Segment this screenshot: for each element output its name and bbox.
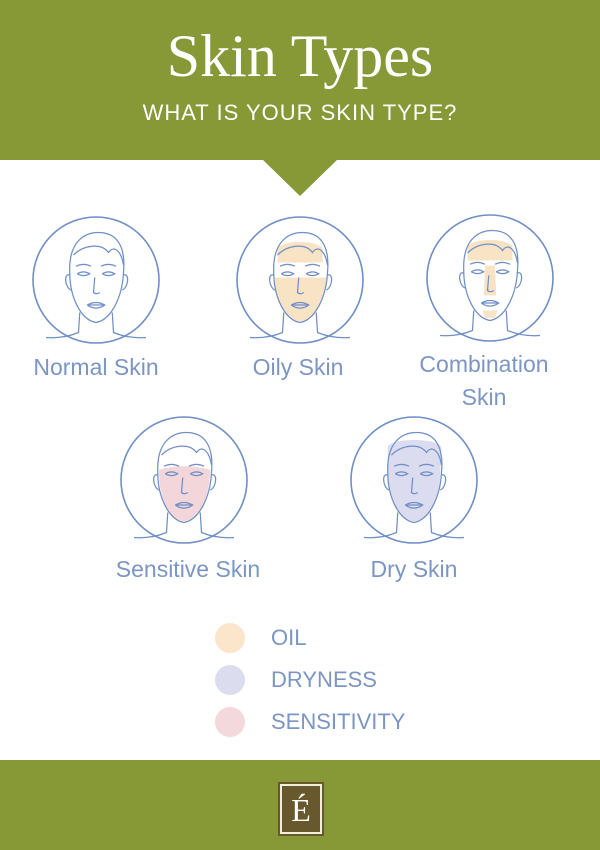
- face: sensitive skin: [121, 417, 247, 543]
- legend: oil: OIL: [271, 625, 306, 650]
- title: Skin Types: [167, 23, 433, 89]
- face: combination skin: [427, 215, 553, 341]
- label: combination skin: [419, 351, 549, 410]
- face: oily skin: [237, 217, 363, 343]
- legend: oil: [215, 623, 306, 653]
- legend: sensitivity: [215, 707, 405, 737]
- header banner: [0, 0, 600, 160]
- label: combination skin: Skin: [462, 384, 506, 410]
- subtitle: WHAT IS YOUR SKIN TYPE?: [143, 100, 457, 125]
- face: dry skin: [351, 417, 477, 543]
- label: oily skin: Oily Skin: [253, 354, 343, 380]
- logo: É: [291, 792, 311, 828]
- label: sensitive skin: Sensitive Skin: [116, 556, 260, 582]
- legend: dryness: DRYNESS: [271, 667, 377, 692]
- legend: dryness: [215, 665, 377, 695]
- header pointer arrow: [262, 159, 338, 196]
- label: normal skin: Normal Skin: [33, 354, 159, 380]
- label: dry skin: Dry Skin: [371, 556, 457, 582]
- face: normal skin: [33, 217, 159, 343]
- legend: sensitivity: SENSITIVITY: [271, 709, 405, 734]
- footer: [0, 760, 600, 850]
- logo: [278, 782, 324, 836]
- label: combination skin: Combination: [419, 351, 549, 377]
